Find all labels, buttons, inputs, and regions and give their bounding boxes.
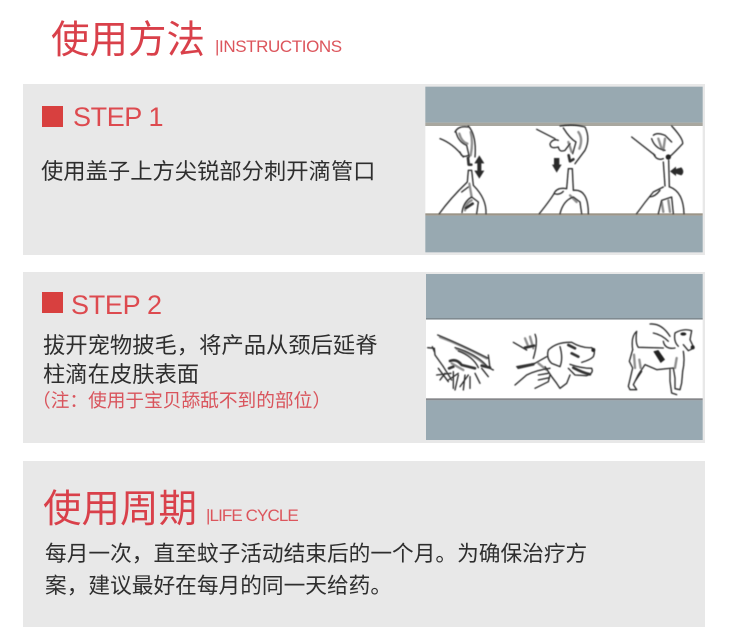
- step 1 heading: STEP 1: [73, 102, 163, 132]
- life cycle text: [45, 541, 587, 598]
- icon: down arrow: [552, 158, 562, 173]
- step 2 text: [43, 333, 378, 387]
- step 1 text: 使用盖子上方尖锐部分刺开滴管口: [41, 159, 375, 184]
- icon: hands, first panel: [439, 126, 486, 214]
- panel: step 2: [23, 272, 705, 443]
- icon: hands, second panel: [537, 125, 588, 214]
- title: instructions: [51, 19, 342, 62]
- icon: hand parting fur: [428, 335, 493, 390]
- icon: standing dog: [628, 324, 695, 395]
- step 2 text: 拔开宠物披毛，将产品从颈后延脊: [43, 333, 378, 358]
- icon: double arrow: [474, 155, 484, 179]
- title: life cycle: 使用周期: [43, 488, 197, 531]
- step 2 heading: STEP 2: [71, 290, 162, 320]
- title: instructions: 使用方法: [51, 19, 205, 62]
- icon: left arrow: [670, 167, 683, 176]
- icon: hands on dog's neck: [513, 334, 595, 388]
- life cycle text: 每月一次，直至蚊子活动结束后的一个月。为确保治疗方: [45, 541, 587, 566]
- life cycle text: 案，建议最好在每月的同一天给药。: [45, 573, 392, 598]
- icon: hands, third panel: [632, 126, 684, 214]
- title: life cycle: [43, 488, 298, 531]
- title: instructions: |INSTRUCTIONS: [215, 37, 342, 56]
- step 2 text: 柱滴在皮肤表面: [43, 362, 199, 387]
- step 2 note: （注：使用于宝贝舔舐不到的部位）: [32, 390, 331, 411]
- title: life cycle: |LIFE CYCLE: [206, 506, 298, 525]
- panel: step 1: [23, 84, 705, 255]
- panel: life cycle: [23, 461, 705, 627]
